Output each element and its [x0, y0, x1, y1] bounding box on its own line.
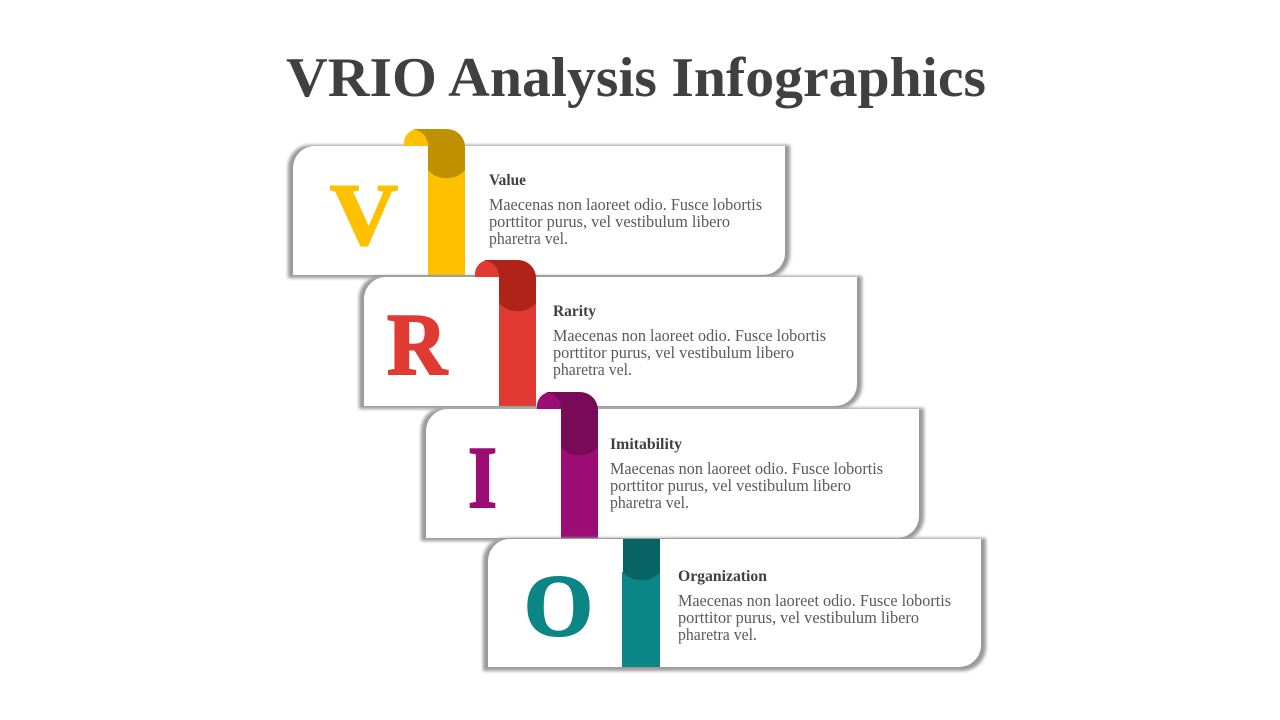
text: value description: Maecenas non laoreet odio. Fusce lobortis [489, 195, 762, 214]
letter: V: V [330, 167, 398, 264]
text: value description: pharetra vel. [489, 229, 568, 248]
heading: imitability: Imitability [610, 436, 682, 453]
text: rarity description [553, 326, 826, 379]
text: organization description [678, 591, 951, 644]
letter: R: R [387, 297, 448, 394]
text: imitability description [610, 459, 883, 512]
text: imitability description: pharetra vel. [610, 493, 689, 512]
letter: I: I [468, 430, 497, 527]
heading: rarity: Rarity [553, 303, 596, 320]
text: rarity description: Maecenas non laoreet odio. Fusce lobortis [553, 326, 826, 345]
text: organization description: pharetra vel. [678, 625, 757, 644]
panel: imitability [421, 392, 924, 541]
ribbon: yellow [404, 129, 465, 275]
heading: organization: Organization [678, 568, 767, 585]
letter: O: O [524, 558, 593, 655]
ribbon: red [475, 260, 536, 406]
panel: value [288, 129, 790, 278]
text: rarity description: pharetra vel. [553, 360, 632, 379]
text: rarity description: porttitor purus, vel vestibulum libero [553, 343, 794, 362]
text: value description: porttitor purus, vel vestibulum libero [489, 212, 730, 231]
panel: rarity [359, 260, 862, 409]
ribbon: teal [622, 539, 660, 667]
title: VRIO Analysis Infographics [286, 47, 986, 109]
panel: organization [483, 538, 986, 671]
text: imitability description: porttitor purus, vel vestibulum libero [610, 476, 851, 495]
ribbon: purple [537, 392, 598, 538]
heading: value: Value [489, 172, 526, 189]
text: organization description: porttitor purus, vel vestibulum libero [678, 608, 919, 627]
text: imitability description: Maecenas non laoreet odio. Fusce lobortis [610, 459, 883, 478]
text: organization description: Maecenas non laoreet odio. Fusce lobortis [678, 591, 951, 610]
text: value description [489, 195, 762, 248]
